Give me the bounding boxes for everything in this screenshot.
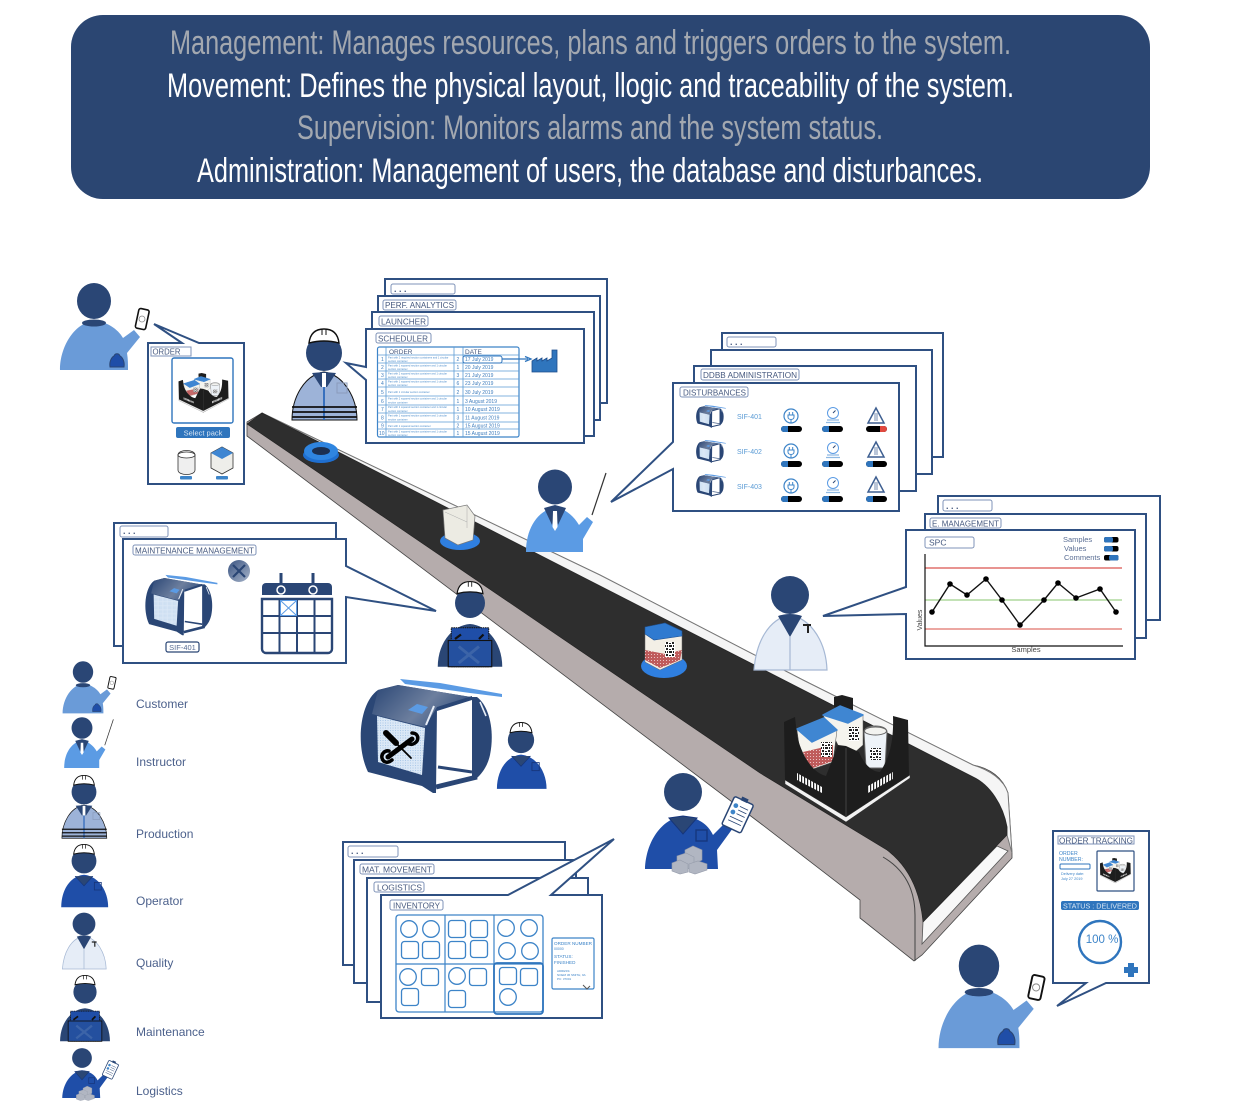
legend: logistics xyxy=(62,1048,183,1101)
tab: performance analytics: PERF. ANALYTICS xyxy=(385,300,454,310)
order info: July 27 2019 xyxy=(1061,877,1083,881)
legend: production: Production xyxy=(136,827,193,841)
legend: operator xyxy=(61,844,183,908)
cube option xyxy=(211,447,233,480)
order table: 15 August 2019 xyxy=(465,431,500,437)
order table: ORDER xyxy=(389,349,413,356)
order table: 10 xyxy=(379,431,385,437)
tab: more xyxy=(120,526,168,537)
order detail card xyxy=(552,938,594,989)
select pack button xyxy=(176,427,230,438)
booth with tools xyxy=(361,679,502,793)
status badge xyxy=(1061,901,1139,910)
order table: section container xyxy=(388,359,408,363)
order table: Part with 1 squared section container xyxy=(388,424,431,428)
panel: order tracking xyxy=(1053,831,1149,1006)
legend: customer: Customer xyxy=(136,697,188,711)
order table: 2 xyxy=(456,424,460,430)
order table xyxy=(378,347,519,437)
person: customer bottom-right xyxy=(939,945,1045,1048)
tab: more: . . . xyxy=(123,526,136,536)
tab: e. management: E. MANAGEMENT xyxy=(932,518,999,528)
legend: quality xyxy=(62,913,173,970)
tab: SPC: SPC xyxy=(929,538,946,548)
order table: 2 xyxy=(456,357,460,363)
order table: Part with 2 squared section container and 1 circular xyxy=(388,405,447,409)
cylinder option xyxy=(178,450,195,480)
order table: 5 xyxy=(381,390,384,396)
pack thumbnail xyxy=(1097,851,1134,891)
row: SIF-402 xyxy=(696,440,887,467)
order info: NUMBER: xyxy=(1059,857,1083,863)
tab: more xyxy=(727,337,776,347)
row: SIF-403: SIF-403 xyxy=(737,484,762,491)
icon: calendar xyxy=(262,573,332,653)
tab: more: . . . xyxy=(394,284,407,294)
legend: customer xyxy=(63,661,188,713)
panel stack: SPC xyxy=(823,496,1160,659)
panel stack: scheduler xyxy=(346,279,607,443)
order detail card: STATUS: xyxy=(554,954,573,959)
order table: 20 July 2019 xyxy=(465,365,494,371)
tab: logistics: LOGISTICS xyxy=(377,882,422,892)
order table: 1 xyxy=(456,407,460,413)
legend: instructor xyxy=(64,717,186,769)
order table: Part with 1 squared section container and 1 circular xyxy=(388,430,447,434)
tab: more xyxy=(943,500,992,511)
order table: 15 August 2019 xyxy=(465,424,500,430)
order detail card: NOEM 36 SMITH, 9A xyxy=(557,973,586,977)
person: quality xyxy=(754,576,827,670)
tab: more xyxy=(348,846,398,857)
order table: section container xyxy=(388,400,408,404)
tab: SPC xyxy=(925,537,974,548)
person: customer top-left xyxy=(60,283,149,370)
order table: 21 July 2019 xyxy=(465,373,494,379)
tab: more: . . . xyxy=(730,337,743,347)
control chart: Samples xyxy=(1011,645,1041,654)
order table: 2 xyxy=(381,365,384,371)
icon: booth with tag: SIF-401 xyxy=(169,643,196,652)
empty puck on belt xyxy=(303,442,339,463)
legend: logistics: Logistics xyxy=(136,1084,183,1098)
order table: 23 July 2019 xyxy=(465,381,494,387)
container on puck xyxy=(440,505,480,550)
panel stack: disturbances xyxy=(611,333,943,511)
tab: maintenance management: MAINTENANCE MANAGEMENT xyxy=(135,546,254,556)
order detail card: 00000 xyxy=(554,947,564,951)
person: instructor xyxy=(526,470,606,552)
order table: 17 July 2019 xyxy=(465,357,494,363)
person: production xyxy=(292,329,357,420)
select pack button: Select pack xyxy=(184,428,223,438)
tab: order tracking: ORDER TRACKING xyxy=(1059,836,1133,846)
panel stack: maintenance management xyxy=(114,523,436,663)
legend: instructor: Instructor xyxy=(136,755,186,769)
tab: ddbb administration: DDBB ADMINISTRATION xyxy=(703,370,797,380)
tab: scheduler: SCHEDULER xyxy=(378,334,428,344)
icon: wrench badge xyxy=(228,560,250,582)
order table: 2 xyxy=(456,390,460,396)
row: SIF-402: SIF-402 xyxy=(737,449,762,456)
order detail card: PC: 37001 xyxy=(557,977,572,981)
header line: administration: Administration: Management of users, the database and disturbances. xyxy=(197,152,983,190)
order table: Part with 2 squared section container and 1 circular xyxy=(388,396,447,400)
tab: launcher: LAUNCHER xyxy=(381,316,426,326)
chart legend: Comments xyxy=(1064,553,1101,562)
control chart: Values xyxy=(917,609,924,630)
chart legend: Samples xyxy=(1063,535,1092,544)
order table: 3 xyxy=(456,416,460,422)
person: logistics xyxy=(645,773,755,874)
order table: 4 xyxy=(381,381,384,387)
order table: Part with 1 squared section container and 1 circular xyxy=(388,364,447,368)
order detail card: FINISHED xyxy=(554,960,576,965)
header banner xyxy=(71,15,1150,199)
order table: DATE xyxy=(465,349,483,356)
order table: 1 xyxy=(456,399,460,405)
order table: Part with 1 circular section container xyxy=(388,390,430,394)
icon: crossed tools xyxy=(382,733,418,762)
icon: booth with tag xyxy=(145,575,217,652)
order info: Delivery date: xyxy=(1061,872,1084,876)
order info: ORDER xyxy=(1059,851,1078,857)
order table: Part with 1 squared section container and 1 circular xyxy=(388,414,447,418)
person: maintenance xyxy=(438,582,502,667)
control chart xyxy=(917,554,1123,654)
order table: 7 xyxy=(381,407,384,413)
order table: section container xyxy=(388,383,408,387)
tab: more xyxy=(391,284,455,294)
tab: more: . . . xyxy=(946,501,959,511)
order table: 3 xyxy=(381,373,384,379)
order table: 3 xyxy=(456,373,460,379)
order table: 30 July 2019 xyxy=(465,390,494,396)
order detail card: ORDER NUMBER xyxy=(554,941,593,946)
chart legend xyxy=(1063,535,1118,562)
arrow to factory xyxy=(502,356,531,362)
row: SIF-401: SIF-401 xyxy=(737,414,762,421)
order table: 8 xyxy=(381,416,384,422)
order table: section container xyxy=(388,367,408,371)
inventory grid xyxy=(396,915,543,1014)
person: operator xyxy=(497,722,547,789)
tab: disturbances: DISTURBANCES xyxy=(683,388,746,398)
pack on belt xyxy=(784,695,910,822)
row: SIF-403 xyxy=(696,474,887,502)
order table: 6 xyxy=(456,381,460,387)
panel: order xyxy=(148,324,244,484)
filled container on puck xyxy=(641,623,687,678)
chart legend: Values xyxy=(1064,544,1087,553)
icon: factory xyxy=(532,350,557,372)
legend: maintenance: Maintenance xyxy=(136,1025,205,1039)
panel stack: inventory xyxy=(343,839,614,1018)
legend: roles xyxy=(60,661,205,1101)
pack preview xyxy=(172,358,233,423)
order info xyxy=(1059,851,1090,881)
tab: more: . . . xyxy=(351,846,364,856)
tab: inventory: INVENTORY xyxy=(393,900,440,910)
progress ring xyxy=(1079,921,1121,963)
order table: 1 xyxy=(456,431,460,437)
conveyor belt xyxy=(247,413,1012,961)
order table: 10 August 2019 xyxy=(465,407,500,413)
order table: section container xyxy=(388,418,408,422)
order detail card: ADRESS: xyxy=(557,969,570,973)
order table: 11 August 2019 xyxy=(465,416,500,422)
status badge: STATUS : DELIVERED xyxy=(1063,903,1137,910)
order table: section container xyxy=(388,433,408,437)
header line: supervision: Supervision: Monitors alarms and the system status. xyxy=(297,109,883,147)
order table: section container xyxy=(388,409,408,413)
order table: 9 xyxy=(381,424,384,430)
legend: maintenance xyxy=(60,975,205,1041)
order table: 3 August 2019 xyxy=(465,399,497,405)
legend: operator: Operator xyxy=(136,894,183,908)
tab: material movement: MAT. MOVEMENT xyxy=(362,864,432,874)
legend: production xyxy=(62,775,193,841)
progress ring: 100 % xyxy=(1086,934,1118,946)
order table: Part with 1 squared section container and 1 circular xyxy=(388,380,447,384)
order table: 1 xyxy=(381,357,384,363)
tab: order: ORDER xyxy=(152,346,180,356)
order table: 1 xyxy=(456,365,460,371)
row: SIF-401 xyxy=(696,405,887,432)
order table: Part with 2 required section containers and 1 circular xyxy=(388,356,449,360)
order table: section container xyxy=(388,375,408,379)
order table: Part with 2 squared section container and 1 circular xyxy=(388,372,447,376)
order table: 6 xyxy=(381,399,384,405)
legend: quality: Quality xyxy=(136,956,173,970)
icon: plus xyxy=(1124,963,1138,977)
